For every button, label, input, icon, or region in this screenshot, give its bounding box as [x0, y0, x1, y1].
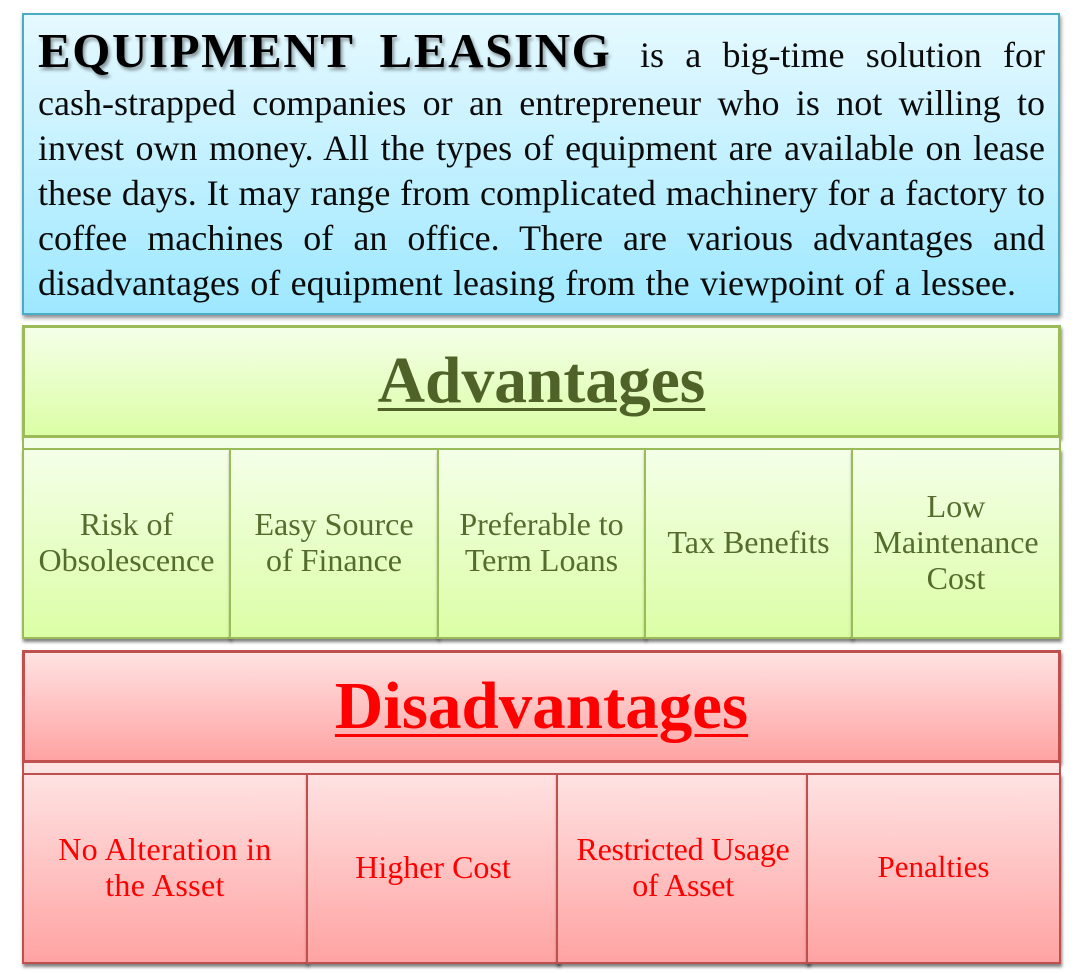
intro text: first line remainder: is a big-time solution for — [640, 35, 1045, 75]
title: equipment leasing: EQUIPMENT LEASING — [38, 23, 611, 78]
panel: advantages band — [22, 438, 1061, 450]
panel: introduction — [22, 13, 1060, 315]
advantage: tax benefits — [644, 448, 853, 639]
advantage: tax benefits: Tax Benefits — [667, 524, 830, 560]
heading: disadvantages: Disadvantages — [335, 669, 748, 743]
intro text: line 3: invest own money. All the types of equipment are available on lease — [38, 128, 1045, 168]
advantage: low maintenance cost: Maintenance — [873, 524, 1039, 560]
heading: advantages — [22, 325, 1061, 438]
disadvantage: no alteration in the asset — [22, 773, 308, 964]
advantage: easy source of finance — [229, 448, 439, 639]
advantage: low maintenance cost: Cost — [927, 560, 985, 596]
disadvantage: no alteration in the asset: No Alteration in — [58, 830, 272, 866]
disadvantage: restricted usage of asset — [556, 773, 810, 964]
disadvantage: higher cost — [306, 773, 560, 964]
advantage: risk of obsolescence: Risk of — [80, 506, 173, 542]
disadvantage: penalties — [806, 773, 1061, 964]
advantage: easy source of finance: Easy Source — [254, 506, 414, 542]
advantage: preferable to term loans — [437, 448, 646, 639]
panel: disadvantages band — [22, 763, 1061, 775]
advantage: risk of obsolescence: Obsolescence — [39, 542, 214, 578]
heading: advantages: Advantages — [378, 345, 705, 417]
disadvantage: no alteration in the asset: the Asset — [105, 866, 225, 902]
intro text: line 6: disadvantages of equipment leasing from the viewpoint of a lessee. — [38, 263, 1016, 303]
advantage: preferable to term loans: Term Loans — [465, 542, 618, 578]
intro text: line 5: coffee machines of an office. There are various advantages and — [38, 218, 1045, 258]
disadvantage: restricted usage of asset: of Asset — [632, 866, 734, 902]
disadvantage: penalties: Penalties — [878, 848, 989, 884]
advantage: preferable to term loans: Preferable to — [459, 506, 624, 542]
advantage: low maintenance cost — [851, 448, 1061, 639]
disadvantage: restricted usage of asset: Restricted Usage — [577, 830, 789, 866]
advantage: risk of obsolescence — [22, 448, 231, 639]
heading: disadvantages — [22, 650, 1061, 763]
advantage: easy source of finance: of Finance — [266, 542, 402, 578]
intro text: line 2: cash-strapped companies or an entrepreneur who is not willing to — [38, 83, 1045, 123]
intro text: line 4: these days. It may range from complicated machinery for a factory to — [38, 173, 1045, 213]
advantage: low maintenance cost: Low — [927, 488, 985, 524]
disadvantage: higher cost: Higher Cost — [355, 848, 511, 884]
